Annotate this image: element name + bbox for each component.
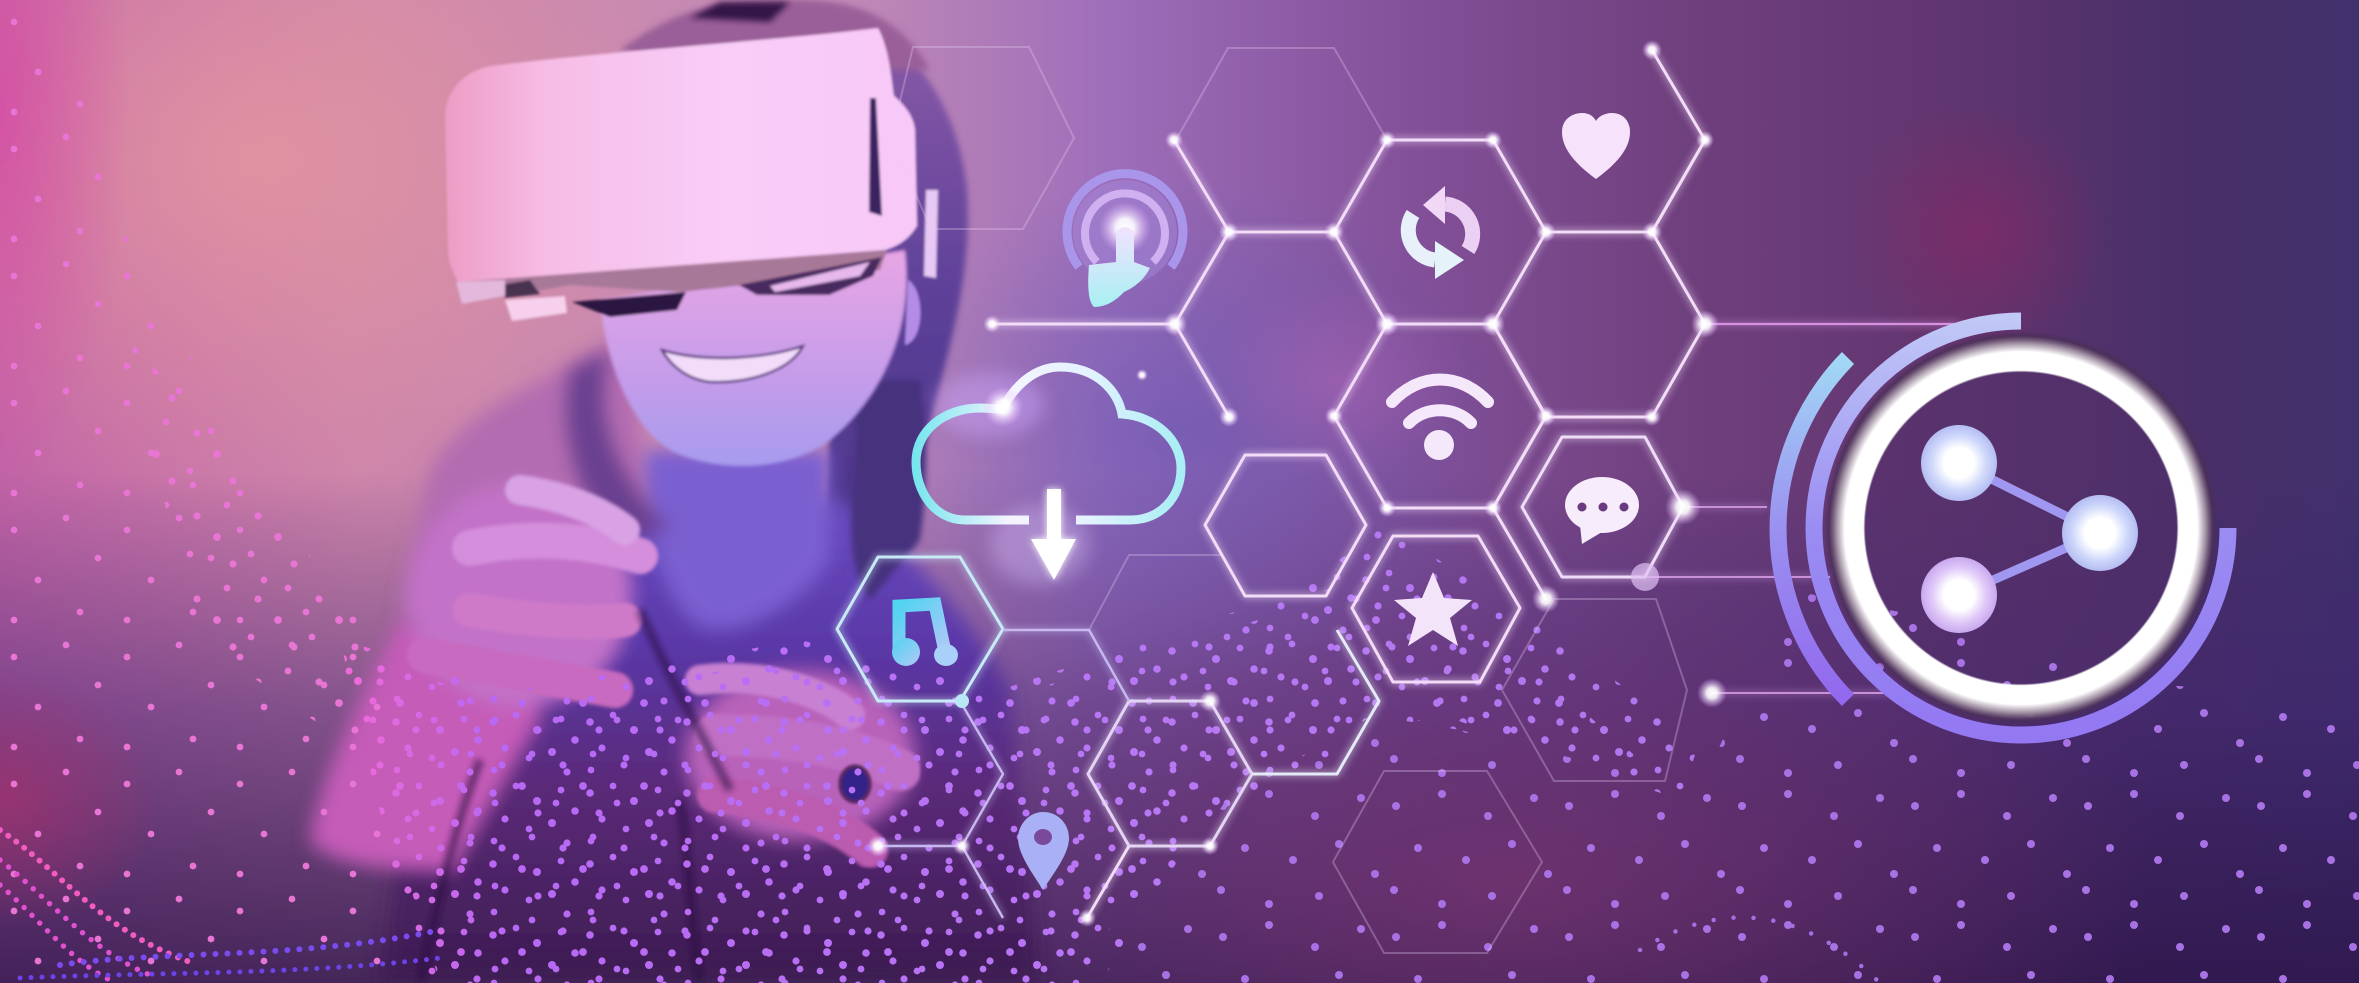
icon: star <box>1394 572 1472 646</box>
hexagon network lines <box>837 50 1960 918</box>
share emblem <box>1778 321 2228 735</box>
right hand palm <box>685 670 915 840</box>
icon: location pin <box>1018 812 1069 890</box>
particle field: bottom right <box>1080 580 2359 983</box>
mouth <box>662 346 803 382</box>
torso <box>380 500 1040 983</box>
neck <box>644 450 830 630</box>
particle field: dense band <box>344 531 1695 983</box>
left hand fingers <box>425 490 640 690</box>
emblem inner disc <box>1863 370 2179 686</box>
icon: chat bubble <box>1565 477 1639 544</box>
icon: touch <box>1067 174 1183 307</box>
face <box>600 250 907 466</box>
icon: wifi <box>1392 380 1488 460</box>
person wearing VR headset <box>310 0 1040 983</box>
share icon <box>1921 425 2138 633</box>
left hand palm <box>408 483 632 707</box>
faint hexagons <box>891 47 1687 953</box>
headset lenses <box>458 250 887 317</box>
icon: cloud download <box>916 367 1181 585</box>
headset body <box>445 28 938 321</box>
ear <box>905 280 920 345</box>
outer arc <box>1778 358 1848 700</box>
hair back <box>400 0 968 620</box>
particle field: left sparse dots <box>10 10 380 964</box>
ring on finger <box>840 766 870 802</box>
icon: sync <box>1408 186 1473 279</box>
hair strands right <box>850 380 926 600</box>
icon: music note <box>892 604 958 666</box>
glowing nodes <box>867 40 1727 927</box>
particle waves <box>0 830 1880 983</box>
hair strands left <box>566 350 670 540</box>
inner arc <box>1814 321 2228 735</box>
left arm <box>310 620 540 872</box>
white ring <box>1824 331 2218 725</box>
right hand fingers <box>700 678 900 850</box>
shirt cord <box>420 610 730 983</box>
icon: heart <box>1562 113 1630 179</box>
